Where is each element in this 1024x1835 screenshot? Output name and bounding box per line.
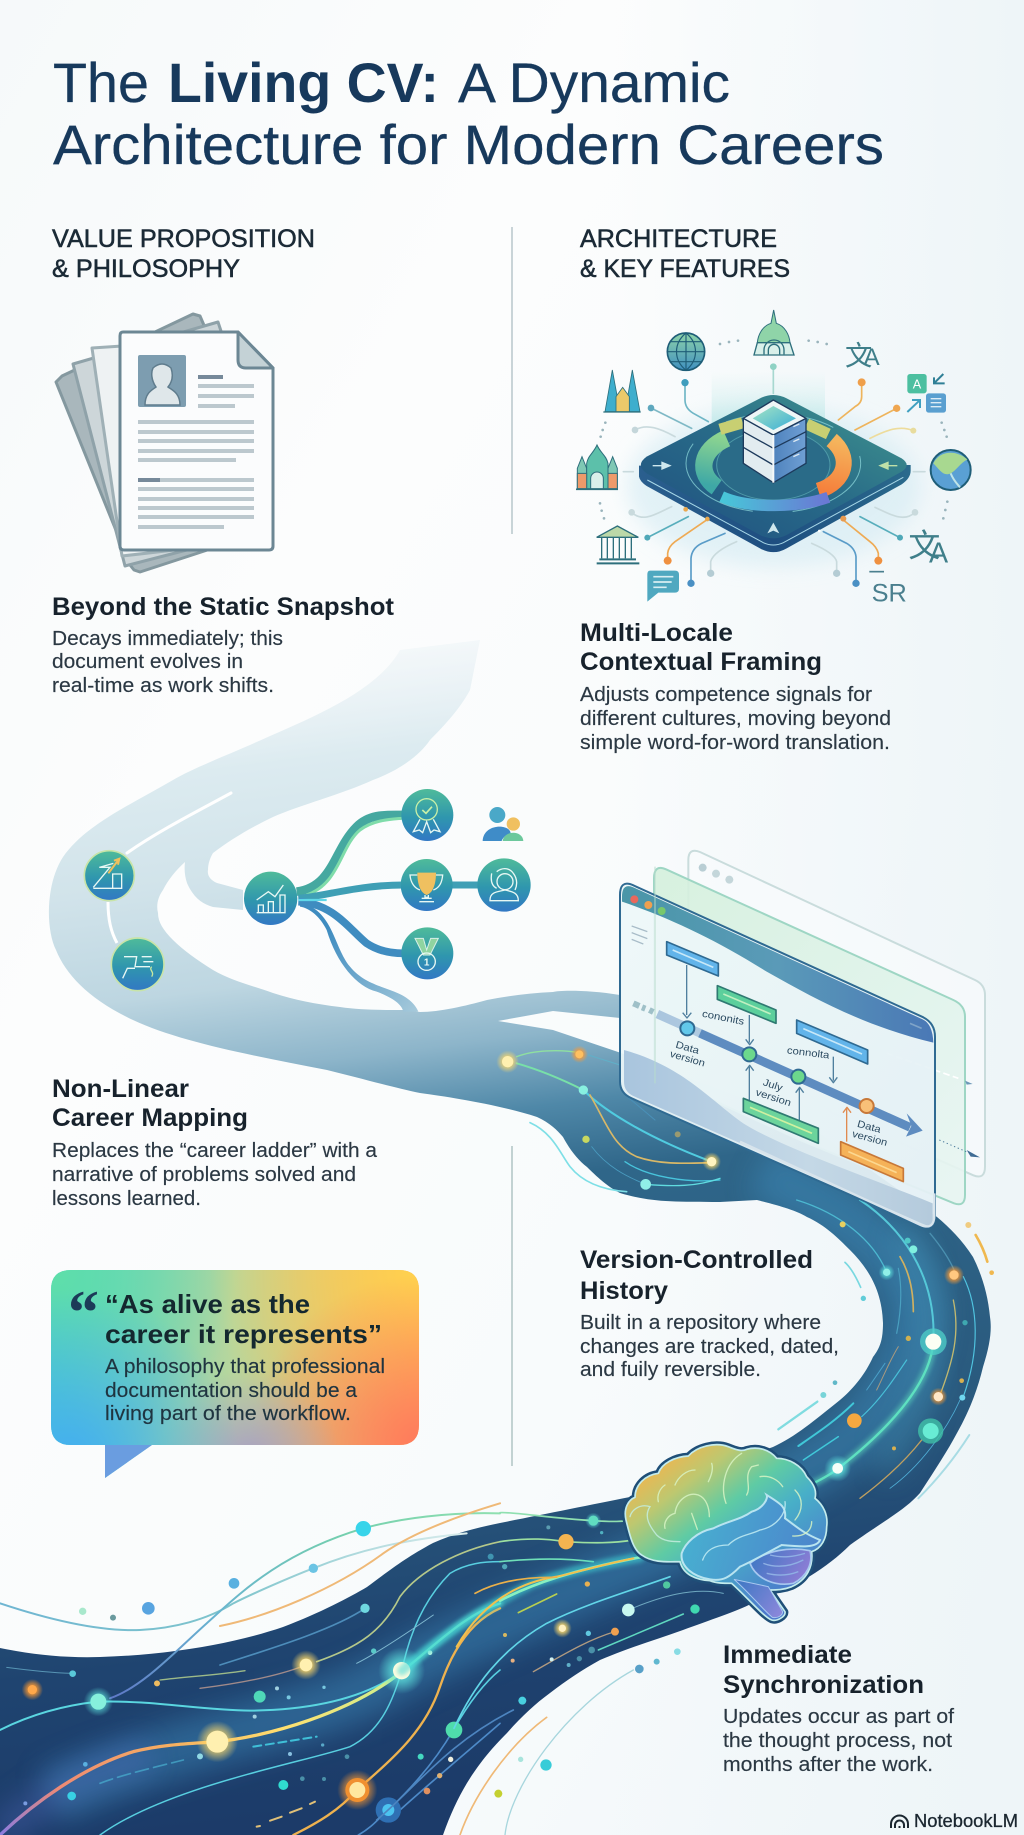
illustration: multi-locale hub bbox=[576, 310, 971, 608]
icon: translate: 文A bbox=[845, 340, 880, 371]
icon: trophy bbox=[401, 859, 453, 911]
text block: immediate synchronization: Updates occur as part of bbox=[723, 1706, 954, 1728]
timeline arrow bbox=[633, 1003, 923, 1137]
title: Living CV: bbox=[168, 51, 439, 114]
server stack bbox=[743, 400, 806, 483]
title: A Dynamic bbox=[458, 51, 730, 114]
icon: ribbon badge bbox=[401, 789, 453, 841]
connector lines bbox=[623, 367, 925, 583]
text block: beyond the static snapshot: real-time as work shifts. bbox=[52, 675, 274, 697]
career map: branching nodes bbox=[84, 789, 531, 1012]
back window bbox=[688, 851, 985, 1177]
icon: earth bbox=[931, 450, 971, 490]
platform bbox=[639, 395, 911, 552]
icon: quotation mark: “ bbox=[68, 1279, 99, 1347]
brain folds bbox=[630, 1453, 812, 1560]
text block: beyond the static snapshot bbox=[52, 593, 395, 697]
speech bubble callout bbox=[51, 1270, 419, 1480]
heading: value proposition and philosophy bbox=[52, 225, 315, 283]
icon: medal: 1 bbox=[424, 957, 430, 968]
temporal lobe bbox=[682, 1495, 820, 1580]
text block: version-controlled history: History bbox=[580, 1277, 668, 1305]
title: Architecture for Modern Careers bbox=[53, 113, 884, 176]
text block: beyond the static snapshot: document evolves in bbox=[52, 651, 243, 673]
text block: multi-locale contextual framing bbox=[580, 619, 891, 754]
window labels bbox=[669, 1009, 889, 1149]
heading: value proposition and philosophy: & PHILOSOPHY bbox=[52, 255, 240, 283]
middle window bbox=[654, 868, 965, 1204]
icon: large translate: 文 bbox=[908, 528, 940, 564]
document text lines bbox=[138, 375, 254, 529]
text block: non-linear career mapping: Replaces the “career ladder” with a bbox=[52, 1140, 378, 1162]
icon: globe bbox=[667, 333, 705, 370]
text block: non-linear career mapping: Career Mapping bbox=[52, 1104, 248, 1132]
icon: stack of CV documents bbox=[56, 314, 273, 572]
text block: multi-locale contextual framing: different cultures, moving beyond bbox=[580, 708, 891, 730]
timeline nodes bbox=[680, 1021, 874, 1113]
window labels: version bbox=[851, 1129, 889, 1149]
text block: immediate synchronization: Immediate bbox=[723, 1641, 852, 1669]
icon: spired cathedral bbox=[603, 370, 641, 412]
flowing career river bbox=[0, 640, 991, 1835]
quote body: living part of the workflow. bbox=[105, 1403, 351, 1425]
text block: non-linear career mapping: Non-Linear bbox=[52, 1075, 189, 1103]
cerebellum bbox=[750, 1549, 811, 1584]
text block: non-linear career mapping: narrative of problems solved and bbox=[52, 1164, 356, 1186]
icon: medal bbox=[401, 927, 453, 979]
icon: language swap tiles: A bbox=[913, 378, 922, 392]
heading: value proposition and philosophy: VALUE PROPOSITION bbox=[52, 225, 315, 253]
icon: broken path bbox=[111, 938, 164, 991]
text block: beyond the static snapshot: Decays immediately; this bbox=[52, 628, 283, 650]
window labels: Data bbox=[856, 1119, 882, 1136]
heading: architecture and key features: & KEY FEATURES bbox=[580, 255, 790, 283]
commit boxes and arrows bbox=[667, 942, 903, 1182]
text block: multi-locale contextual framing: Multi-Locale bbox=[580, 619, 733, 647]
quote heading: career it represents” bbox=[105, 1319, 382, 1349]
heading: architecture and key features bbox=[580, 225, 790, 283]
glowing nodes bbox=[22, 1521, 462, 1823]
quote body: documentation should be a bbox=[105, 1380, 358, 1402]
data streams: emerging from behind the window bbox=[496, 1046, 721, 1192]
quote heading: “As alive as the bbox=[105, 1289, 310, 1319]
icon: large translate: A bbox=[929, 538, 949, 570]
illustration: version history windows bbox=[620, 851, 985, 1227]
brain stem bbox=[734, 1579, 783, 1618]
icon: stairs and arrow bbox=[84, 851, 134, 901]
data streams: lower left bbox=[0, 1503, 500, 1835]
text block: immediate synchronization: Synchronization bbox=[723, 1671, 924, 1699]
text block: immediate synchronization: the thought process, not bbox=[723, 1730, 952, 1752]
quote body bbox=[105, 1356, 385, 1425]
text block: non-linear career mapping: lessons learned. bbox=[52, 1188, 201, 1210]
window labels: connolta bbox=[786, 1045, 830, 1062]
window labels: version bbox=[669, 1049, 706, 1069]
brain bbox=[625, 1445, 827, 1620]
icon: script letters: SR bbox=[872, 580, 907, 608]
window labels: cononits bbox=[701, 1009, 745, 1028]
icon: portrait photo bbox=[138, 355, 186, 407]
window labels: July bbox=[761, 1077, 784, 1094]
icon: team bbox=[477, 858, 531, 912]
icon: growth chart bbox=[244, 872, 297, 925]
text block: version-controlled history: and fuily reversible. bbox=[580, 1359, 761, 1381]
text block: multi-locale contextual framing: simple word-for-word translation. bbox=[580, 732, 890, 754]
text block: version-controlled history: changes are tracked, dated, bbox=[580, 1336, 839, 1358]
text block: version-controlled history bbox=[580, 1246, 839, 1381]
NotebookLM badge: NotebookLM bbox=[914, 1811, 1018, 1831]
text block: version-controlled history: Built in a repository where bbox=[580, 1312, 821, 1334]
icon: domed building bbox=[754, 310, 794, 355]
data streams: toward the brain bbox=[377, 1513, 723, 1835]
text block: multi-locale contextual framing: Adjusts competence signals for bbox=[580, 684, 872, 706]
text block: immediate synchronization bbox=[723, 1641, 954, 1776]
window buttons bbox=[630, 895, 666, 915]
icon: classical bank bbox=[597, 526, 639, 563]
text block: multi-locale contextual framing: Contextual Framing bbox=[580, 648, 822, 676]
branch lines bbox=[297, 815, 480, 1012]
text block: immediate synchronization: months after the work. bbox=[723, 1754, 933, 1776]
window labels: Data bbox=[674, 1040, 701, 1057]
icon: palace bbox=[576, 445, 618, 489]
heading: architecture and key features: ARCHITECTURE bbox=[580, 225, 777, 253]
text block: version-controlled history: Version-Controlled bbox=[580, 1246, 813, 1274]
text block: non-linear career mapping bbox=[52, 1075, 378, 1210]
title bbox=[53, 51, 884, 176]
title: The bbox=[53, 51, 149, 114]
icon: people bbox=[483, 807, 523, 841]
icon: chat bubble bbox=[647, 571, 679, 602]
front window bbox=[620, 867, 935, 1227]
text block: beyond the static snapshot: Beyond the Static Snapshot bbox=[52, 593, 395, 621]
quote body: A philosophy that professional bbox=[105, 1356, 385, 1378]
data streams: right-hand curve bbox=[778, 1200, 994, 1498]
icon: language swap tiles bbox=[907, 374, 946, 413]
window labels: version bbox=[754, 1087, 792, 1109]
quote heading bbox=[105, 1289, 382, 1349]
connector end dots bbox=[628, 363, 918, 587]
